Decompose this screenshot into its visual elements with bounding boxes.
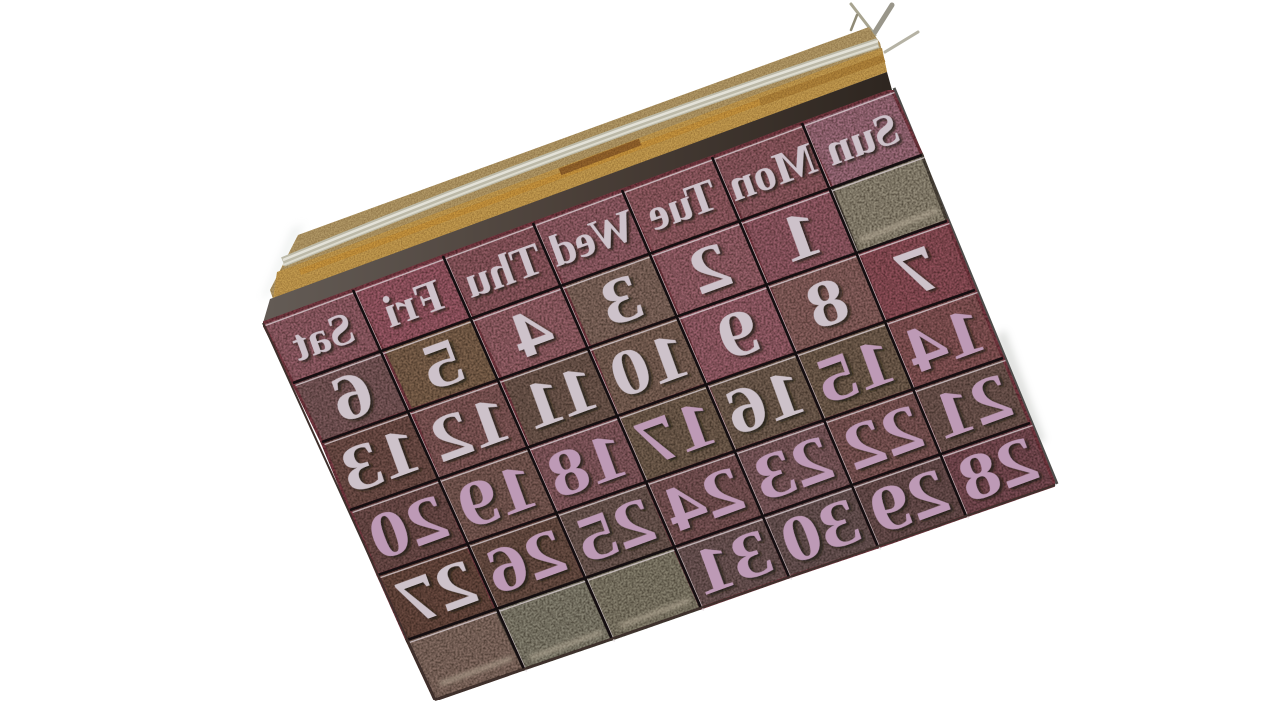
face: 28 (941, 423, 1055, 516)
face: 19 (439, 447, 557, 544)
face: 23 (735, 420, 852, 516)
face: 9 (679, 284, 796, 384)
numeral: 1: 1 (769, 195, 831, 277)
face: blank slug right (585, 547, 701, 639)
face: 5 (383, 318, 501, 410)
numeral: 30: 30 (770, 483, 870, 579)
face: Fri (353, 256, 473, 350)
face: Sun (802, 90, 922, 188)
face: 7 (858, 221, 975, 321)
metal side edge (894, 88, 1057, 484)
numeral: 19: 19 (447, 448, 547, 544)
face: Tue (622, 157, 742, 253)
face: Mon (712, 123, 832, 220)
numeral: 27: 27 (387, 544, 487, 640)
numeral: 18: 18 (537, 417, 637, 513)
numeral: 20: 20 (358, 479, 458, 575)
numeral: 10: 10 (599, 317, 699, 413)
face: 12 (411, 379, 529, 479)
numeral: 8: 8 (796, 262, 858, 344)
dark gap below the bar (263, 72, 892, 323)
face: 2 (652, 220, 768, 316)
face: 30 (763, 485, 878, 577)
numeral: 11: 11 (512, 350, 608, 444)
numeral: 4: 4 (501, 291, 563, 373)
numeral: 16: 16 (715, 354, 815, 450)
face: 6 (293, 350, 411, 442)
face: 18 (529, 416, 646, 513)
face: 25 (557, 482, 674, 578)
label: Mon: Mon (721, 133, 823, 211)
label: Tue: Tue (640, 169, 724, 241)
face: 24 (646, 451, 763, 547)
face: Thu (443, 223, 563, 318)
numeral: 13: 13 (330, 412, 430, 508)
panel: weekday headings (285, 103, 906, 371)
numeral: 12: 12 (420, 381, 520, 477)
numeral: 2: 2 (679, 227, 741, 309)
numeral: 31: 31 (682, 514, 782, 610)
wooden bar (270, 27, 887, 299)
face: 26 (467, 513, 585, 609)
face: Wed (533, 190, 652, 285)
numeral: 9: 9 (707, 293, 769, 375)
panel: type faces (263, 90, 1055, 700)
face: 13 (322, 410, 439, 510)
label: Thu: Thu (457, 233, 549, 308)
numeral: 7: 7 (886, 230, 948, 312)
icon: twine ends (851, 4, 918, 52)
numeral: 14: 14 (895, 292, 995, 388)
numeral: 25: 25 (565, 482, 665, 578)
face: blank slug left (407, 609, 524, 700)
face: 3 (563, 253, 679, 347)
string along the bar (283, 41, 878, 265)
numeral: 17: 17 (626, 385, 726, 481)
label: Sat: Sat (285, 302, 361, 371)
numeral: 23: 23 (743, 420, 843, 516)
face: blank slug middle (496, 578, 612, 669)
label: Fri: Fri (376, 270, 450, 337)
face: 11 (501, 347, 618, 447)
numeral: 28: 28 (948, 421, 1048, 517)
label: Sun: Sun (818, 103, 906, 175)
face: 29 (852, 454, 966, 547)
face: blank slug top (832, 155, 947, 253)
face: 15 (796, 321, 914, 420)
face: 10 (590, 316, 707, 416)
numeral: 3: 3 (590, 259, 652, 341)
face: 21 (914, 358, 1030, 454)
soft shadow around the block (262, 224, 1045, 446)
numeral: 5: 5 (411, 323, 473, 405)
numeral: 29: 29 (859, 453, 959, 549)
numeral: 22: 22 (833, 389, 933, 485)
face: 4 (473, 285, 590, 379)
numeral: 15: 15 (805, 323, 905, 419)
numeral: 26: 26 (476, 513, 576, 609)
face: 1 (742, 188, 858, 284)
face: Sat (263, 290, 383, 383)
face: 8 (768, 253, 886, 353)
worn highlights on blank slugs (440, 210, 938, 684)
label: Wed: Wed (543, 200, 642, 276)
face: 17 (618, 384, 735, 482)
panel: mirrored date numerals (321, 195, 1048, 640)
face: 16 (707, 353, 824, 451)
face: 14 (886, 290, 1003, 389)
face: 31 (674, 516, 789, 608)
face: 27 (378, 544, 496, 640)
numeral: 24: 24 (654, 451, 754, 547)
face: 20 (350, 479, 467, 575)
numeral: 6: 6 (321, 355, 383, 437)
numeral: 21: 21 (922, 358, 1022, 454)
face: 22 (824, 389, 941, 485)
